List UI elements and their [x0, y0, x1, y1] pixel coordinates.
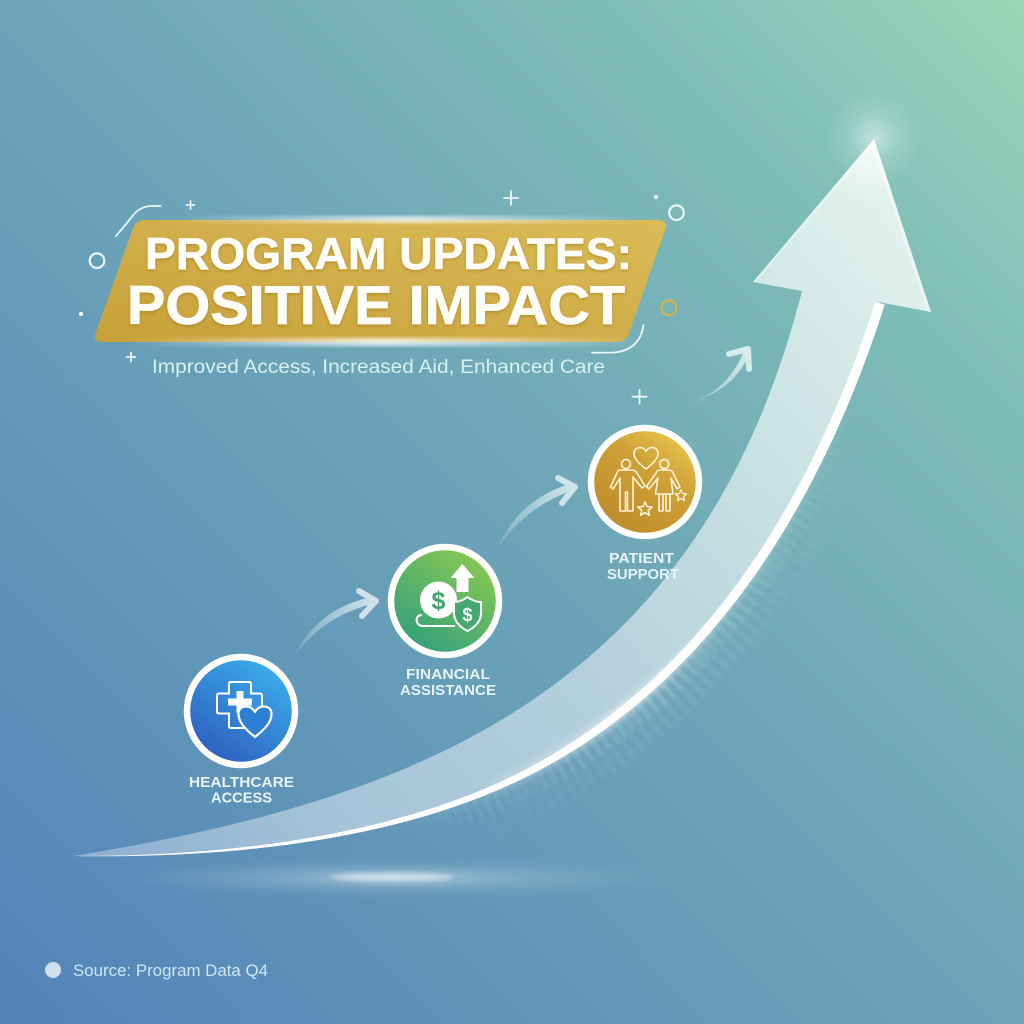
- gold parallelogram: [95, 220, 666, 342]
- arrow body and head: [73, 139, 931, 856]
- icon: medical cross and heart: [187, 657, 295, 765]
- label: SUPPORT: [607, 566, 679, 583]
- label: ASSISTANCE: [400, 682, 496, 699]
- banner highlights: [170, 216, 640, 223]
- icon: coin, shield and up arrow: $: [432, 587, 446, 615]
- subtitle: Improved Access, Increased Aid, Enhanced Care: [152, 357, 605, 378]
- light rays under the arrow: [73, 303, 880, 856]
- icon: coin, shield and up arrow: $: [462, 605, 473, 625]
- label: [607, 550, 679, 583]
- source note: Source: Program Data Q4: [73, 962, 268, 980]
- arrow head bright edge: [753, 139, 931, 312]
- decorative sparkles around banner: [79, 191, 684, 404]
- step 1: healthcare access: [187, 657, 295, 806]
- arrow head tip highlight: [753, 139, 931, 312]
- title banner: [95, 216, 666, 346]
- icon: coin, shield and up arrow: [391, 547, 499, 655]
- label: FINANCIAL: [406, 666, 490, 683]
- glow along the edge: [489, 627, 707, 788]
- icon: couple, heart and stars: [591, 428, 699, 536]
- arrow: patient support onward: [673, 349, 749, 408]
- arrow: healthcare to financial: [295, 591, 376, 655]
- white edge stroke: [73, 301, 885, 856]
- arrow tip glow: [826, 90, 922, 186]
- title line 2: POSITIVE IMPACT: [127, 275, 625, 336]
- label: ACCESS: [211, 790, 272, 806]
- label: HEALTHCARE: [189, 774, 294, 791]
- label: [400, 666, 496, 699]
- floor glow: [125, 861, 665, 895]
- label: PATIENT: [609, 550, 674, 567]
- label: [189, 774, 294, 806]
- step 3: patient support: [591, 428, 699, 583]
- title line 1: PROGRAM UPDATES:: [145, 230, 632, 279]
- large growth arrow: [73, 90, 931, 856]
- arrow: financial to patient support: [498, 478, 575, 547]
- step 2: financial assistance: [391, 547, 499, 699]
